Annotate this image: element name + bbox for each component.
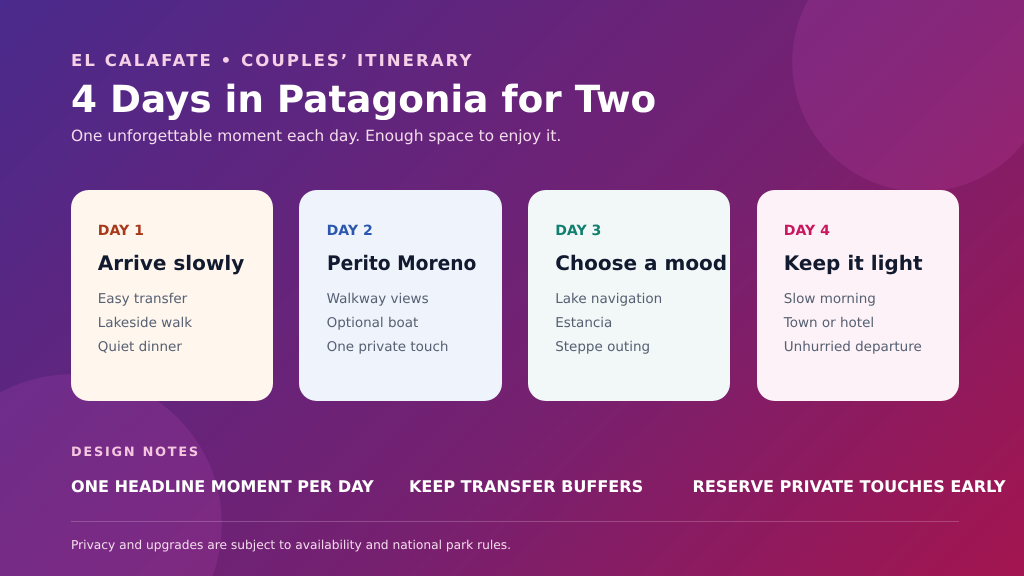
day 4 label: DAY 4 — [784, 223, 830, 239]
panel: day 4 — [757, 190, 959, 401]
panel: day 2 — [299, 190, 502, 401]
note: transfer buffers: KEEP TRANSFER BUFFERS — [409, 477, 643, 496]
day 3 item: steppe: Steppe outing — [555, 339, 650, 355]
design notes heading: DESIGN NOTES — [71, 444, 200, 460]
day 1 heading: Arrive slowly — [98, 251, 244, 275]
panel: day 1 — [71, 190, 273, 401]
eyebrow: EL CALAFATE • COUPLES’ ITINERARY — [71, 51, 474, 70]
day 2 item: private touch: One private touch — [327, 339, 448, 355]
panel: day 3 — [528, 190, 730, 401]
decorative circle: top right — [792, 0, 1024, 192]
title: 4 Days in Patagonia for Two — [71, 77, 656, 121]
note: headline moment: ONE HEADLINE MOMENT PER DAY — [71, 477, 374, 496]
note: private touches: RESERVE PRIVATE TOUCHES EARLY — [692, 477, 1005, 496]
day 3 item: estancia: Estancia — [555, 315, 612, 331]
footer disclaimer: Privacy and upgrades are subject to availability and national park rules. — [71, 538, 511, 552]
day 3 heading: Choose a mood — [555, 251, 727, 275]
day 3 label: DAY 3 — [555, 223, 601, 239]
subtitle: One unforgettable moment each day. Enough space to enjoy it. — [71, 126, 561, 144]
day 4 item: morning: Slow morning — [784, 291, 876, 307]
day 2 heading: Perito Moreno — [327, 251, 476, 275]
day 2 label: DAY 2 — [327, 223, 373, 239]
day 2 item: boat: Optional boat — [327, 315, 418, 331]
day 1 item: transfer: Easy transfer — [98, 291, 187, 307]
day 4 heading: Keep it light — [784, 251, 923, 275]
day 4 item: departure: Unhurried departure — [784, 339, 922, 355]
day 2 item: walkway: Walkway views — [327, 291, 429, 307]
day 1 label: DAY 1 — [98, 223, 144, 239]
day 3 item: lake: Lake navigation — [555, 291, 662, 307]
decorative circle: bottom left — [0, 374, 222, 576]
day 4 item: town: Town or hotel — [784, 315, 874, 331]
day 1 item: dinner: Quiet dinner — [98, 339, 182, 355]
day 1 item: walk: Lakeside walk — [98, 315, 192, 331]
